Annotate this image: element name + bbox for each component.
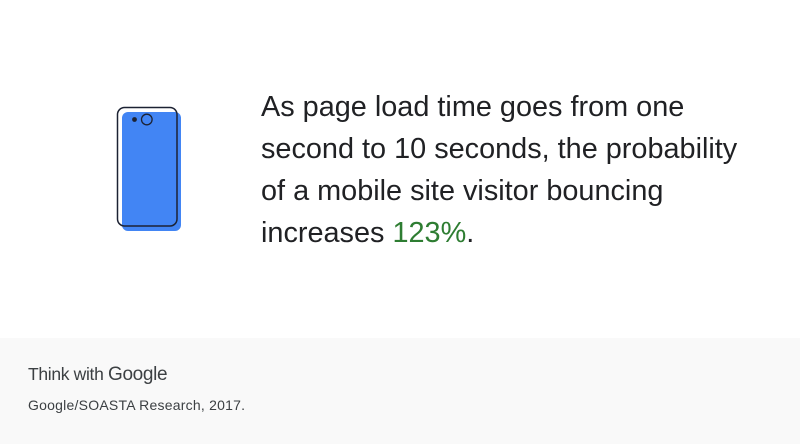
footer panel — [0, 338, 800, 444]
source citation: Google/SOASTA Research, 2017. — [28, 397, 245, 413]
text block: main statement: of a mobile site visitor bouncing — [261, 175, 663, 207]
text block: main statement: As page load time goes from one — [261, 91, 684, 123]
text block: main statement — [261, 91, 738, 249]
icon: mobile phone — [116, 106, 181, 231]
logo: Think with Google: Think with Google — [28, 364, 167, 385]
text block: main statement: increases 123%. — [261, 217, 474, 249]
text block: main statement: second to 10 seconds, the probability — [261, 133, 737, 165]
